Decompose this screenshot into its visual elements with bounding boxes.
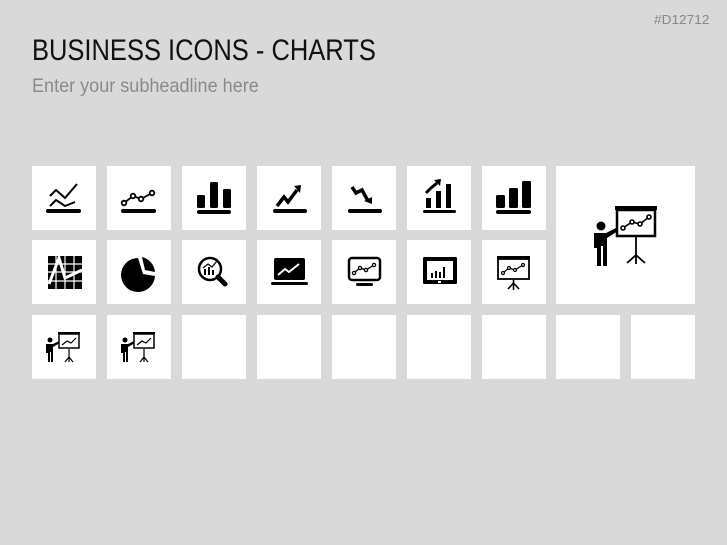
subheadline: Enter your subheadline here bbox=[32, 76, 259, 97]
empty tile 6 bbox=[556, 315, 620, 379]
icon tile: monitor bbox=[332, 240, 396, 304]
icon tile: magnifier chart bbox=[182, 240, 246, 304]
empty tile 7 bbox=[631, 315, 695, 379]
icon tile: bars with arrow bbox=[407, 166, 471, 230]
icon tile: grid chart bbox=[32, 240, 96, 304]
icon tile: flipchart bbox=[482, 240, 546, 304]
icon tile: line chart bbox=[32, 166, 96, 230]
title: BUSINESS ICONS - CHARTS bbox=[32, 34, 376, 67]
icon tile: pie chart bbox=[107, 240, 171, 304]
empty tile 4 bbox=[407, 315, 471, 379]
icon tile: TV bars bbox=[407, 240, 471, 304]
icon tile: dot line bbox=[107, 166, 171, 230]
icon tile: bars bbox=[482, 166, 546, 230]
empty tile 1 bbox=[182, 315, 246, 379]
icon tile: laptop bbox=[257, 240, 321, 304]
icon tile: rising arrow bbox=[257, 166, 321, 230]
empty tile 2 bbox=[257, 315, 321, 379]
icon tile: presenter small 1 bbox=[32, 315, 96, 379]
icon tile: bar chart bbox=[182, 166, 246, 230]
icon tile: falling arrow bbox=[332, 166, 396, 230]
code label: #D12712 bbox=[654, 12, 709, 27]
empty tile 3 bbox=[332, 315, 396, 379]
big tile: presenter bbox=[556, 166, 695, 304]
icon tile: presenter small 2 bbox=[107, 315, 171, 379]
empty tile 5 bbox=[482, 315, 546, 379]
